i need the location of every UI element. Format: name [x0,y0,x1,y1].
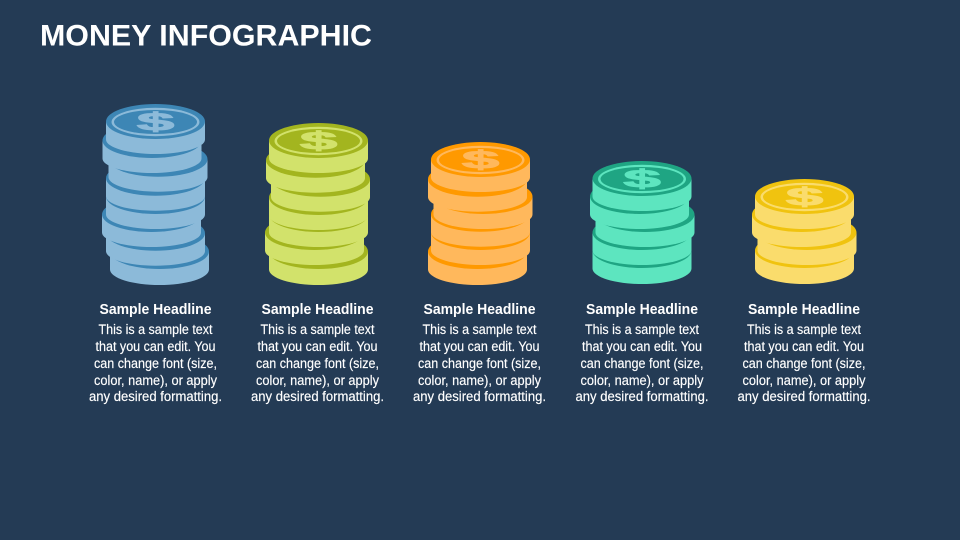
coin stack 4: $ [623,164,661,192]
text block 1: that you can edit. You [96,339,216,354]
text block 3 [413,302,546,404]
text block 5: This is a sample text [747,322,861,337]
panel: column 3 orange [413,142,546,404]
coin stack 4 [590,161,694,284]
text block 4: that you can edit. You [582,339,702,354]
panel: column 4 green [576,161,708,404]
text block 2: This is a sample text [260,322,375,337]
text block 5: Sample Headline [748,302,860,318]
text block 1: Sample Headline [100,302,212,318]
panel: column 2 lime [251,123,384,404]
text block 2: color, name), or apply [256,373,379,388]
coin stack 5 [752,179,856,284]
coin stack 2 [265,123,370,285]
coin stack 3 [428,142,532,285]
coin stack 1 [102,104,209,285]
panel: column 5 yellow [738,179,870,404]
text block 3: any desired formatting. [413,389,546,404]
text block 3: This is a sample text [422,322,537,337]
text block 1: any desired formatting. [89,389,222,404]
text block 4: any desired formatting. [576,389,708,404]
text block 2 [251,302,384,404]
text block 1: This is a sample text [98,322,213,337]
text block 5 [738,302,870,404]
text block 3: Sample Headline [424,302,536,318]
text block 2: any desired formatting. [251,389,384,404]
text block 4: can change font (size, [580,356,704,371]
text block 4: color, name), or apply [580,373,704,388]
text block 3: can change font (size, [418,356,541,371]
text block 2: that you can edit. You [258,339,378,354]
text block 2: can change font (size, [256,356,379,371]
text block 4: Sample Headline [586,302,698,318]
text block 5: any desired formatting. [738,389,870,404]
text block 5: can change font (size, [742,356,866,371]
coin stack 3: $ [462,145,499,173]
text block 4 [576,302,708,404]
text block 1: color, name), or apply [94,373,217,388]
text block 2: Sample Headline [262,302,374,318]
text block 3: that you can edit. You [420,339,540,354]
coin stack 2: $ [300,126,337,154]
text block 3: color, name), or apply [418,373,541,388]
coin stack 5: $ [786,182,823,210]
text block 4: This is a sample text [585,322,699,337]
text block 5: that you can edit. You [744,339,864,354]
panel: column 1 blue [89,104,222,404]
text block 5: color, name), or apply [742,373,866,388]
text block 1: can change font (size, [94,356,217,371]
coin stack 1: $ [137,107,174,135]
text block 1 [89,302,222,404]
title: MONEY INFOGRAPHIC [40,20,372,52]
